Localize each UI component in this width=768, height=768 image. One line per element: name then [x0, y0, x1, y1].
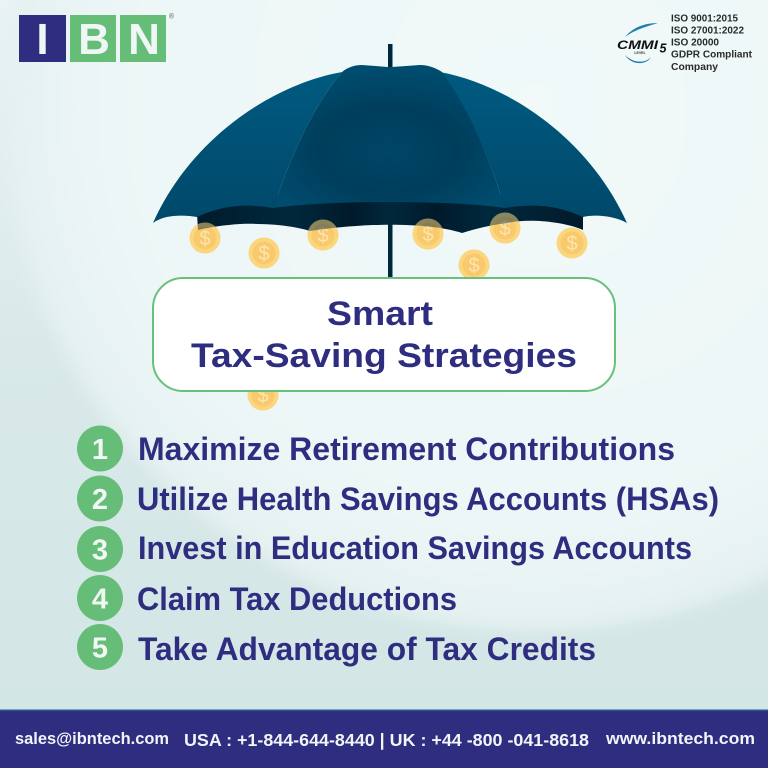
- certification badge: CMMI level 5: [617, 23, 668, 63]
- logo: IBN: B: [78, 15, 110, 64]
- footer website: www.ibntech.com: [605, 729, 755, 748]
- certification badge: CMMI level 5: 5: [660, 42, 668, 56]
- footer email: sales@ibntech.com: [15, 729, 169, 748]
- certification badge: CMMI level 5: CMMI: [617, 40, 659, 52]
- logo: IBN: ®: [169, 12, 175, 20]
- certification list: GDPR Compliant: [671, 50, 753, 61]
- footer phone numbers: USA : +1-844-644-8440 | UK : +44 -800 -041-8618: [184, 730, 589, 750]
- coins behind umbrella and card: [190, 212, 588, 410]
- list item 5: Take Advantage of Tax Credits: [138, 631, 596, 667]
- logo: IBN: [19, 12, 175, 64]
- list item 2: [77, 476, 719, 522]
- list item 5: [77, 624, 596, 670]
- certification list: ISO 9001:2015: [671, 14, 738, 24]
- list item 3: [77, 526, 692, 572]
- certification list: Company: [671, 62, 718, 73]
- logo: IBN: I: [36, 15, 49, 64]
- certification list: ISO 20000: [671, 38, 719, 49]
- list item 1: 1: [92, 434, 108, 466]
- umbrella centre panel: [273, 65, 505, 208]
- title: Tax-Saving Strategies: [191, 337, 577, 375]
- list item 4: [77, 575, 457, 621]
- logo: IBN: N: [128, 15, 160, 64]
- list item 1: Maximize Retirement Contributions: [138, 431, 675, 467]
- umbrella: [153, 44, 627, 277]
- coin highlights over umbrella lining: [190, 212, 520, 254]
- list item 5: 5: [92, 632, 108, 664]
- list item 4: 4: [92, 584, 108, 616]
- umbrella left panel: [153, 72, 342, 223]
- certification badge: CMMI level 5: LEVEL: [634, 51, 647, 55]
- title card: [153, 278, 615, 391]
- list item 3: Invest in Education Savings Accounts: [138, 530, 692, 566]
- list item 3: 3: [92, 534, 108, 566]
- certification list: ISO 27001:2022: [671, 26, 744, 36]
- list item 4: Claim Tax Deductions: [137, 581, 457, 617]
- umbrella lining: [197, 195, 583, 233]
- umbrella right panel: [440, 72, 627, 223]
- umbrella pole: [388, 44, 392, 277]
- footer bar: [0, 710, 768, 768]
- list item 2: Utilize Health Savings Accounts (HSAs): [137, 481, 719, 517]
- title: Smart: [327, 295, 433, 333]
- certification list: [671, 14, 753, 73]
- list item 2: 2: [92, 484, 108, 516]
- title: [191, 295, 577, 375]
